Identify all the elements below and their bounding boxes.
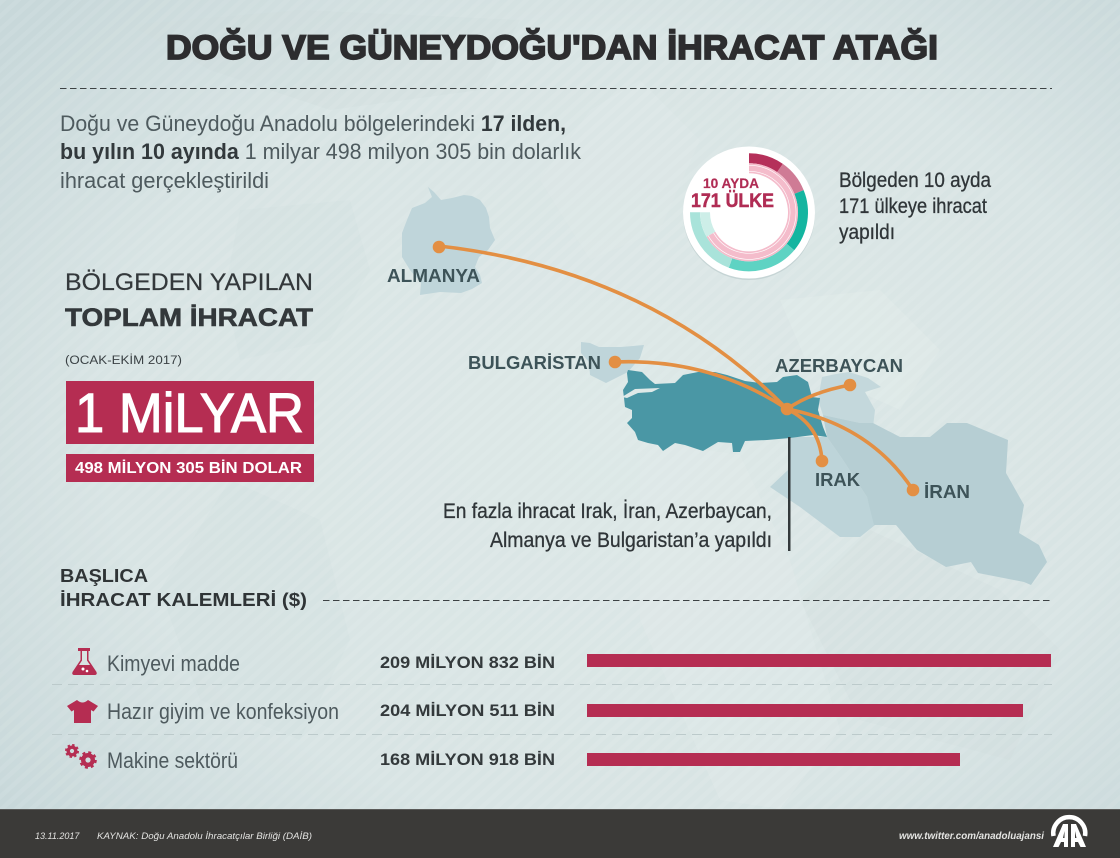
map shape: Iran bbox=[823, 415, 1047, 585]
text: exported to 171 countries bbox=[839, 169, 991, 244]
row: machinery: 168 MİLYON 918 BİN bbox=[380, 750, 555, 769]
section heading: main export items bbox=[60, 565, 307, 610]
text: exported to 171 countries: yapıldı bbox=[839, 221, 895, 244]
country labels: İRAN bbox=[924, 482, 970, 502]
map: countries and export routes bbox=[387, 187, 1047, 585]
callout: top export destinations bbox=[443, 437, 790, 552]
intro text block: bu yılın 10 ayında 1 milyar 498 milyon 305 bin dolarlık bbox=[60, 139, 582, 164]
row: machinery bbox=[66, 745, 960, 773]
callout: top export destinations: Almanya ve Bulgaristan’a yapıldı bbox=[490, 529, 772, 552]
row: ready-to-wear bbox=[67, 699, 1023, 724]
map shape: Germany bbox=[402, 187, 495, 295]
country labels bbox=[387, 266, 970, 502]
callout: top export destinations: En fazla ihracat Irak, İran, Azerbaycan, bbox=[443, 500, 772, 523]
title: DOĞU VE GÜNEYDOĞU'DAN İHRACAT ATAĞI bbox=[166, 29, 938, 67]
intro text block bbox=[60, 111, 582, 193]
panel: total exports bbox=[65, 269, 314, 482]
map shape: Turkey bbox=[622, 370, 827, 452]
country labels: BULGARİSTAN bbox=[468, 353, 601, 373]
row: chemicals: 209 MİLYON 832 BİN bbox=[380, 653, 555, 672]
row: ready-to-wear: 204 MİLYON 511 BİN bbox=[380, 701, 555, 720]
row: chemicals: Kimyevi madde bbox=[107, 651, 240, 676]
text: exported to 171 countries: 171 ülkeye ihracat bbox=[839, 195, 987, 218]
footer source text: 13.11.2017 bbox=[35, 831, 80, 841]
text: exported to 171 countries: Bölgeden 10 ayda bbox=[839, 169, 991, 192]
bar: machinery bbox=[587, 753, 960, 766]
bar: chemicals bbox=[587, 654, 1051, 667]
country labels: IRAK bbox=[815, 470, 860, 490]
intro text block: ihracat gerçekleştirildi bbox=[60, 168, 269, 193]
route dots bbox=[433, 241, 919, 496]
date range: (OCAK-EKİM 2017) bbox=[65, 354, 182, 367]
footer social link: www.twitter.com/anadoluajansi bbox=[899, 831, 1044, 842]
total: remainder bbox=[66, 454, 314, 482]
section heading: main export items: İHRACAT KALEMLERİ ($) bbox=[60, 589, 307, 610]
section heading: main export items: BAŞLICA bbox=[60, 565, 148, 586]
logo: Anadolu Agency bbox=[1053, 817, 1086, 847]
total: one billion: 1 MiLYAR bbox=[75, 381, 304, 444]
icon: t-shirt bbox=[67, 700, 98, 723]
row: chemicals bbox=[72, 648, 1051, 676]
donut label: 10 AYDA bbox=[703, 175, 759, 191]
total: remainder: 498 MİLYON 305 BİN DOLAR bbox=[75, 459, 302, 477]
footer bbox=[0, 809, 1120, 858]
map shape: Iraq bbox=[770, 437, 875, 537]
heading: total exports: TOPLAM İHRACAT bbox=[65, 304, 313, 332]
donut chart: 171 countries bbox=[683, 146, 815, 280]
row: machinery: Makine sektörü bbox=[107, 748, 238, 773]
bar: ready-to-wear bbox=[587, 704, 1023, 717]
donut label: 171 ÜLKE bbox=[691, 189, 774, 212]
country labels: ALMANYA bbox=[387, 266, 480, 286]
map shape: Azerbaijan and Caucasus bbox=[818, 372, 881, 427]
heading: total exports bbox=[65, 269, 313, 332]
heading: total exports: BÖLGEDEN YAPILAN bbox=[65, 269, 313, 296]
intro text block: Doğu ve Güneydoğu Anadolu bölgelerindeki 17 ilden, bbox=[60, 111, 566, 136]
donut label bbox=[691, 175, 774, 212]
map shape: Bulgaria bbox=[581, 342, 644, 383]
country labels: AZERBAYCAN bbox=[775, 356, 903, 376]
export routes bbox=[439, 246, 913, 490]
icon: flask bbox=[72, 648, 97, 675]
icon: gears bbox=[66, 745, 96, 768]
footer source text: KAYNAK: Doğu Anadolu İhracatçılar Birliği (DAİB) bbox=[97, 831, 312, 841]
row: ready-to-wear: Hazır giyim ve konfeksiyon bbox=[107, 699, 339, 724]
